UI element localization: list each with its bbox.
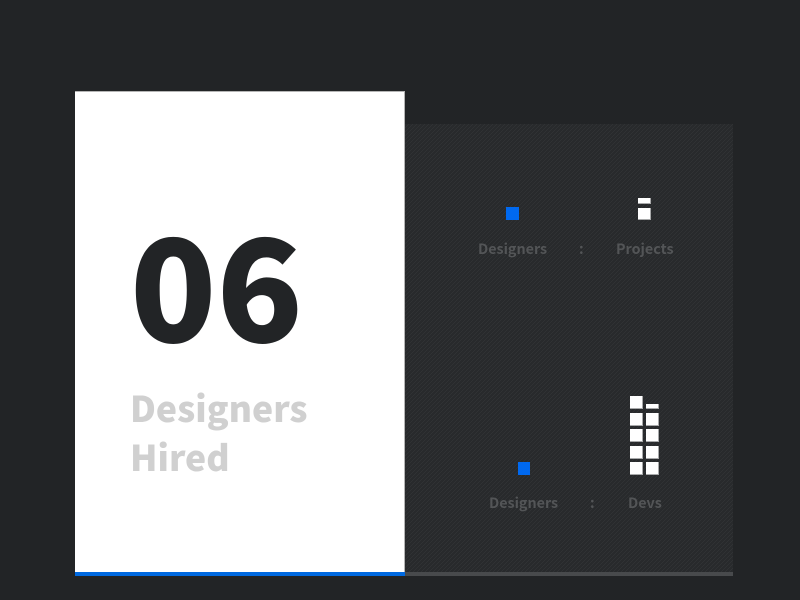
icon: designer square — [506, 207, 519, 220]
label: devs: Devs — [628, 492, 662, 513]
big number: 06 — [130, 177, 303, 383]
caption: designers hired: Designers — [130, 382, 308, 433]
caption: designers hired — [130, 382, 308, 482]
blue accent bar — [75, 572, 405, 576]
label: projects: Projects — [616, 238, 674, 259]
panel: ratios background — [405, 124, 733, 576]
ratio: designers to projects — [478, 198, 674, 259]
icon: project squares — [638, 198, 651, 220]
icon: designer square — [518, 462, 530, 475]
panel: white card — [75, 91, 405, 576]
separator colon: : — [579, 238, 584, 259]
label: designers: Designers — [478, 238, 547, 259]
caption: designers hired: Hired — [130, 431, 230, 482]
icon: dev squares — [630, 396, 659, 475]
separator colon: : — [590, 492, 595, 513]
ratio: designers to devs — [489, 396, 662, 513]
bottom grey bar — [405, 572, 733, 576]
label: designers: Designers — [489, 492, 558, 513]
